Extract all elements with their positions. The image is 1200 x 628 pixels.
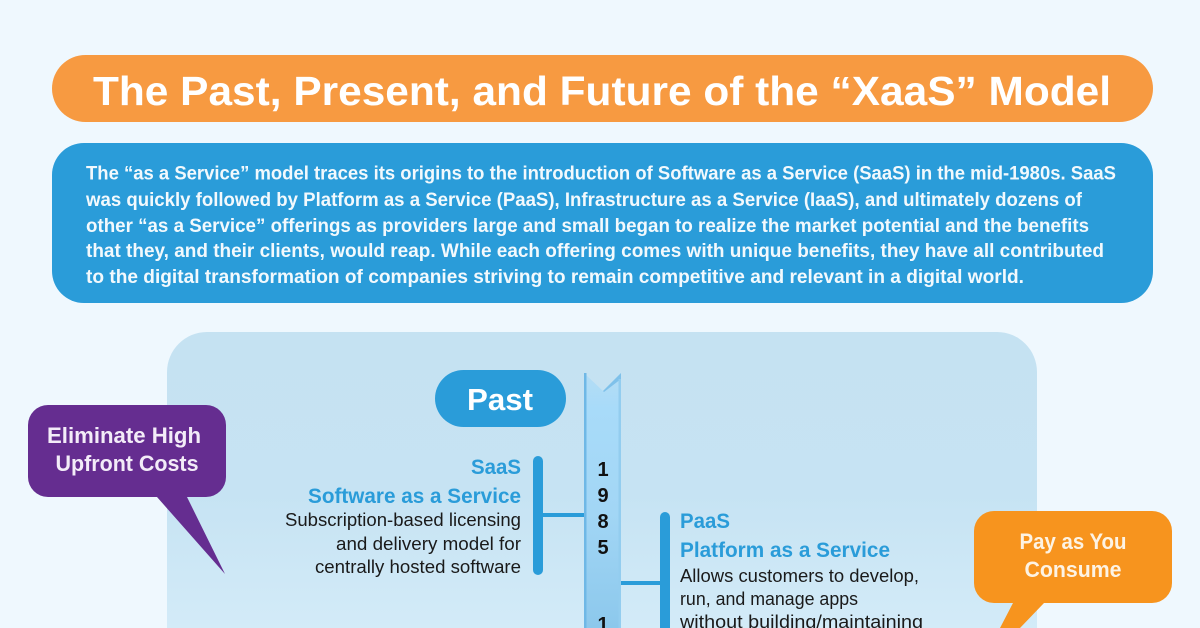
PaaS entry [621,510,923,628]
callout: pay as you consume [974,511,1172,628]
intro text panel: The “as a Service” model traces its origins to the introduction of Software as a Service (SaaS) in the mid-1980s. SaaS [86,164,1116,184]
SaaS entry [285,456,584,577]
intro text panel: was quickly followed by Platform as a Service (PaaS), Infrastructure as a Service (IaaS), and ultimately dozens of [85,190,1083,211]
PaaS entry: PaaS [680,510,730,533]
timeline years: 1 [597,459,609,481]
SaaS entry: Subscription-based licensing [285,510,521,530]
past label pill [435,370,566,427]
title banner [52,55,1153,122]
intro text panel: that they, and their clients, would reap. While each offering comes with unique benefits, they have all contributed [86,241,1104,262]
timeline ribbon [584,373,621,628]
timeline years: 8 [597,511,609,533]
callout: pay as you consume: Pay as You [1020,529,1126,554]
SaaS entry: SaaS [471,456,521,479]
intro text panel [52,143,1153,303]
PaaS entry: Allows customers to develop, [680,566,919,586]
intro text panel: to the digital transformation of companies striving to remain competitive and relevant in a digital world. [86,267,1024,288]
title banner: The Past, Present, and Future of the “XaaS” Model [93,68,1111,114]
timeline years: 5 [597,537,609,559]
callout: eliminate high upfront costs: Eliminate High [47,423,201,448]
callout: eliminate high upfront costs: Upfront Costs [56,451,198,476]
past label pill: Past [467,382,533,417]
timeline panel [167,332,1037,628]
PaaS entry: run, and manage apps [680,589,858,609]
callout: pay as you consume: Consume [1024,557,1122,582]
PaaS entry: Platform as a Service [680,539,890,562]
SaaS entry: centrally hosted software [315,557,521,577]
SaaS entry: and delivery model for [336,534,521,554]
intro text panel: other “as a Service” offerings as providers large and small began to realize the market potential and the benefits [86,216,1089,237]
callout: eliminate high upfront costs [28,405,226,574]
SaaS entry: Software as a Service [308,485,521,508]
timeline years [597,459,609,628]
timeline years: 9 [597,485,609,507]
